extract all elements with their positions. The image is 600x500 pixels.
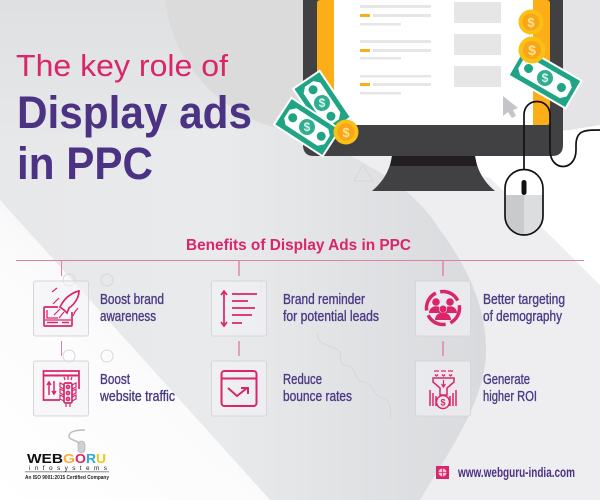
monitor illustration bbox=[303, 0, 563, 191]
icon: browser with traffic light bbox=[44, 371, 79, 407]
benefit: bounce rates bbox=[212, 361, 352, 416]
label: higher ROI bbox=[483, 389, 537, 405]
money bills left: $ bbox=[304, 120, 311, 134]
label: website traffic bbox=[99, 389, 175, 405]
mouse and cord bbox=[505, 102, 600, 235]
title: Display ads bbox=[17, 87, 252, 138]
title: The key role of bbox=[16, 48, 228, 83]
money bills left: $ bbox=[319, 96, 326, 110]
label bbox=[483, 292, 565, 325]
benefit: brand awareness bbox=[34, 281, 164, 336]
section heading: Benefits of Display Ads in PPC bbox=[186, 237, 411, 254]
icon: text lines with arrow bbox=[221, 291, 257, 326]
title bbox=[16, 48, 252, 189]
label: for potential leads bbox=[283, 309, 379, 325]
decorative outlines bbox=[63, 165, 391, 418]
label bbox=[283, 372, 352, 405]
benefit: website traffic bbox=[34, 361, 175, 416]
label: Reduce bbox=[283, 372, 322, 388]
label: Boost brand bbox=[100, 292, 164, 308]
icon: globe bbox=[436, 466, 449, 479]
label bbox=[283, 292, 379, 325]
icon: audience target bbox=[424, 289, 462, 327]
label: Generate bbox=[483, 372, 530, 388]
money and coins right: $ bbox=[542, 71, 549, 85]
benefit: targeting bbox=[416, 281, 565, 336]
logo: Webguru Infosystems: U bbox=[96, 451, 106, 466]
logo: Webguru Infosystems: An ISO 9001:2015 Certified Company bbox=[25, 475, 109, 481]
logo: Webguru Infosystems: G bbox=[63, 451, 75, 466]
heading rule and connectors bbox=[16, 260, 584, 356]
label: bounce rates bbox=[283, 389, 352, 405]
icon: rocket and screen bbox=[44, 288, 79, 326]
label: awareness bbox=[100, 309, 156, 325]
label: Boost bbox=[100, 372, 130, 388]
benefit: brand reminder bbox=[212, 281, 379, 336]
label: Better targeting bbox=[483, 292, 565, 308]
logo: Webguru Infosystems: WEB bbox=[27, 451, 63, 466]
icon: browser with down arrow bbox=[222, 371, 256, 406]
logo: Webguru Infosystems bbox=[25, 430, 109, 481]
logo: Webguru Infosystems: O bbox=[75, 451, 86, 466]
label: Brand reminder bbox=[283, 292, 365, 308]
benefit: ROI bbox=[416, 361, 537, 416]
money bills left bbox=[273, 69, 358, 158]
label bbox=[99, 372, 175, 405]
title: in PPC bbox=[17, 138, 153, 189]
label bbox=[100, 292, 164, 325]
money and coins right: $ bbox=[527, 15, 535, 30]
money and coins right bbox=[507, 10, 583, 110]
money and coins right: $ bbox=[528, 42, 536, 58]
icon: funnel with dollar bbox=[430, 371, 456, 408]
logo: Webguru Infosystems: infosystems bbox=[29, 465, 108, 472]
money bills left: $ bbox=[342, 125, 350, 140]
benefit: ROI: $ bbox=[440, 398, 446, 408]
screen content lines bbox=[360, 2, 501, 94]
label bbox=[483, 372, 537, 405]
label: of demography bbox=[483, 309, 563, 325]
logo: Webguru Infosystems: R bbox=[86, 451, 97, 466]
